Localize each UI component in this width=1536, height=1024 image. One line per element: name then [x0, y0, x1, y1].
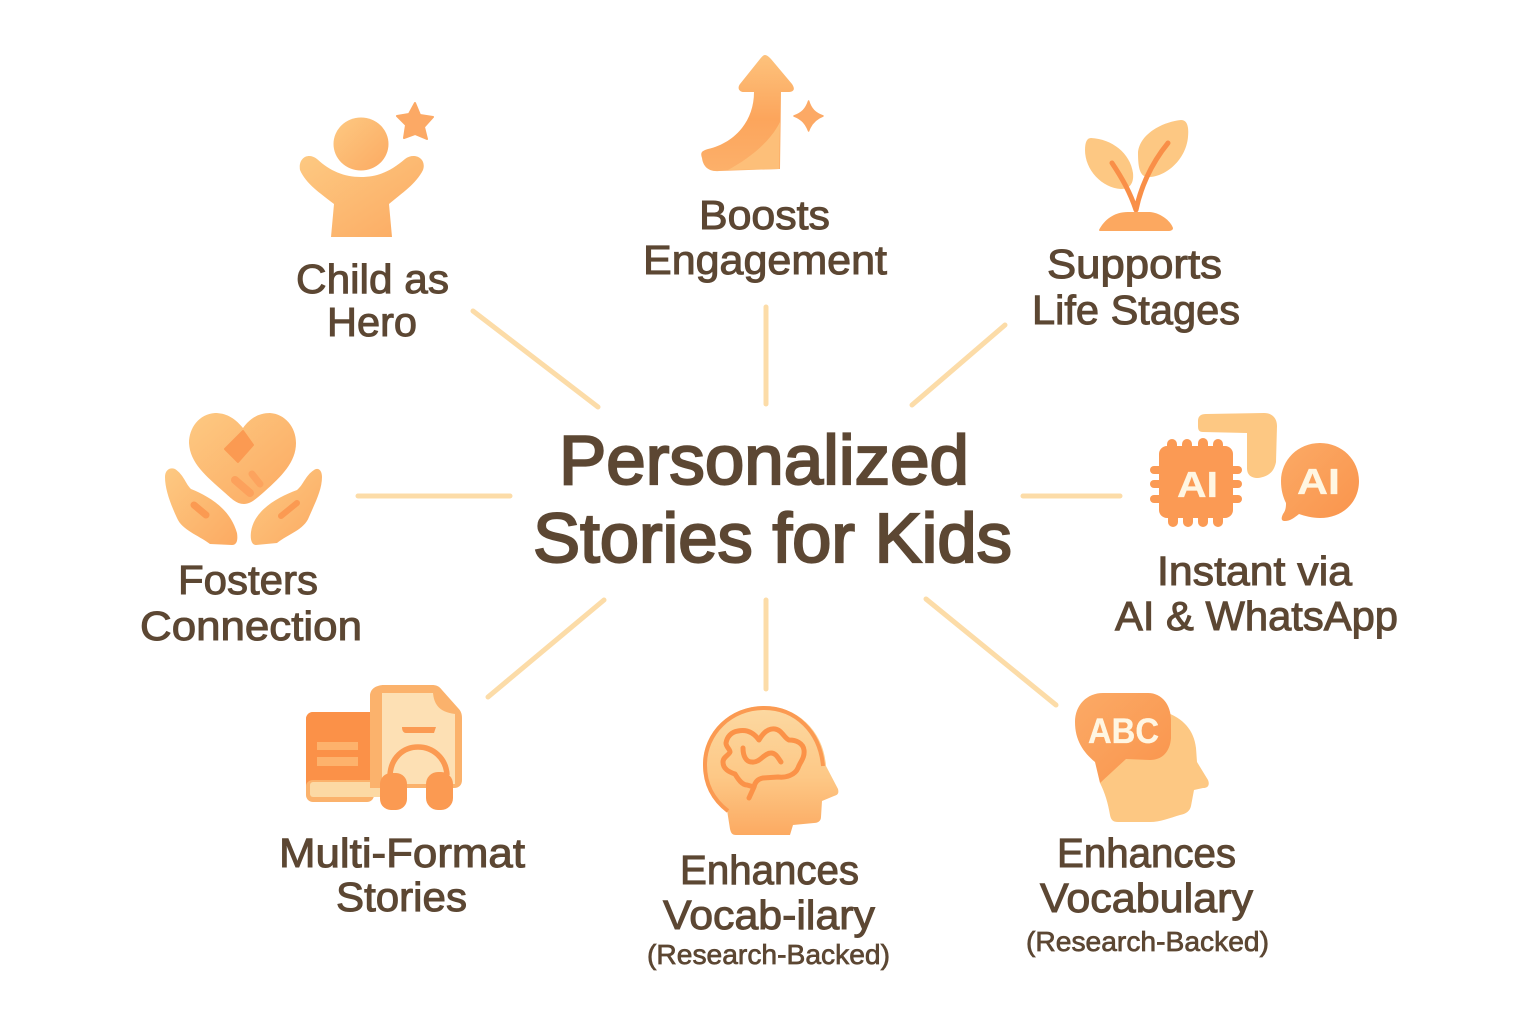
label: Boosts Engagement — [643, 192, 887, 283]
panel: supports life stages — [1032, 120, 1240, 333]
label: Enhances Vocab-ilary (Research-Backed): (Research-Backed) — [647, 939, 890, 970]
icon: book, document and headphones — [306, 685, 462, 810]
icon: head with brain — [703, 706, 838, 835]
label: Enhances Vocab-ilary (Research-Backed): Vocab-ilary — [663, 892, 876, 938]
label: Boosts Engagement: Boosts — [699, 192, 830, 238]
label: Child as Hero — [296, 256, 449, 345]
label: Instant via AI and WhatsApp: AI & WhatsApp — [1115, 593, 1398, 639]
title: Personalized — [559, 421, 969, 499]
label: Multi-Format Stories: Multi-Format — [279, 830, 525, 876]
label: Child as Hero: Child as — [296, 256, 449, 302]
label: Supports Life Stages: Supports — [1047, 241, 1222, 287]
label: Instant via AI and WhatsApp: Instant via — [1157, 548, 1352, 594]
label: Fosters Connection: Fosters — [178, 557, 318, 603]
label: Enhances Vocabulary (Research-Backed) — [1026, 830, 1269, 957]
panel: child as hero — [296, 103, 449, 345]
label: Supports Life Stages: Life Stages — [1032, 287, 1240, 333]
icon: AI chip and chat bubble — [1150, 413, 1359, 527]
label: Multi-Format Stories: Stories — [336, 874, 467, 920]
label: Enhances Vocabulary (Research-Backed): (Research-Backed) — [1026, 926, 1269, 957]
title: Stories for Kids — [533, 499, 1012, 577]
icon: child with star — [300, 103, 433, 237]
label: Multi-Format Stories — [279, 830, 525, 920]
icon: head with ABC speech bubble: ABC — [1088, 712, 1159, 751]
label: Child as Hero: Hero — [327, 299, 417, 345]
icon: rising arrow with sparkle — [701, 55, 823, 171]
icon: AI chip and chat bubble: AI — [1297, 461, 1340, 502]
panel: enhances vocab-ilary — [647, 706, 890, 970]
icon: head with ABC speech bubble — [1075, 693, 1209, 822]
icon: heart in hands — [165, 413, 322, 545]
panel: instant via AI and WhatsApp — [1115, 413, 1398, 639]
icon: AI chip and chat bubble: AI — [1177, 464, 1218, 505]
label: Boosts Engagement: Engagement — [643, 237, 887, 283]
panel: boosts engagement — [643, 55, 887, 283]
label: Supports Life Stages — [1032, 241, 1240, 333]
connector lines — [358, 307, 1120, 705]
label: Fosters Connection — [140, 557, 362, 649]
panel: enhances vocabulary — [1026, 693, 1269, 957]
label: Enhances Vocabulary (Research-Backed): Enhances — [1057, 830, 1236, 876]
icon: sprout — [1085, 120, 1188, 231]
label: Fosters Connection: Connection — [140, 603, 362, 649]
label: Instant via AI and WhatsApp — [1115, 548, 1398, 639]
label: Enhances Vocab-ilary (Research-Backed) — [647, 847, 890, 970]
label: Enhances Vocab-ilary (Research-Backed): Enhances — [680, 847, 859, 893]
panel: multi-format stories — [279, 685, 525, 920]
label: Enhances Vocabulary (Research-Backed): Vocabulary — [1040, 875, 1254, 921]
panel: fosters connection — [140, 413, 362, 649]
title — [533, 421, 1012, 577]
